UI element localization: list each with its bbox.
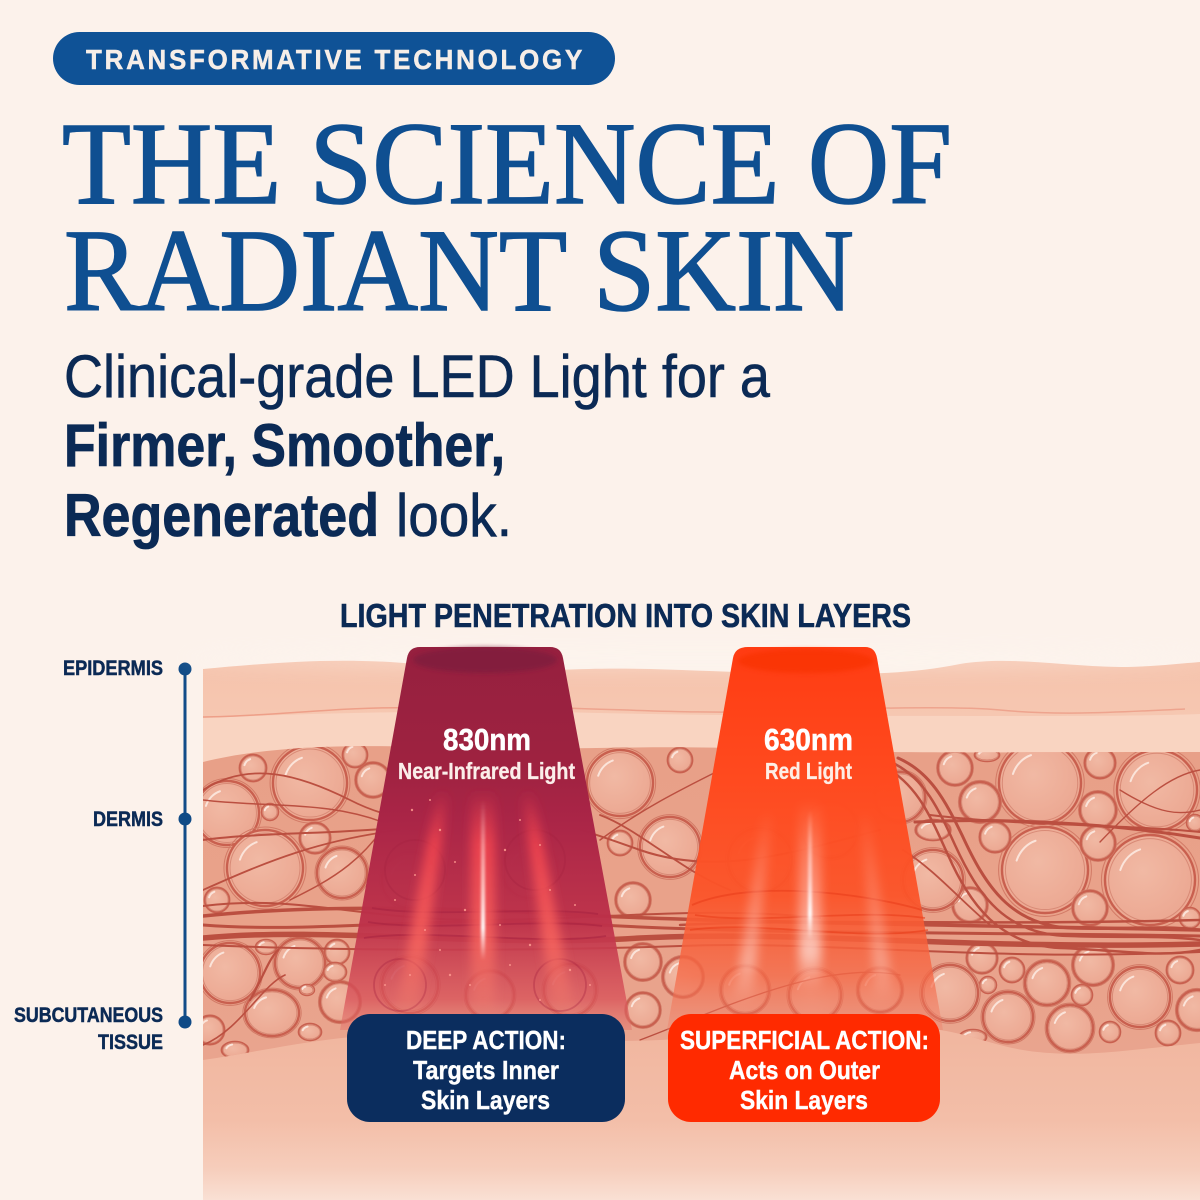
dermis and fat cells [192, 739, 1200, 1065]
subtitle: Firmer, Smoother, [64, 412, 505, 479]
light beam: 630nm red: Red Light [765, 758, 852, 784]
title: RADIANT SKIN [64, 205, 854, 336]
subtitle: Regenerated [64, 482, 379, 549]
light beam: 630nm red [667, 647, 943, 1030]
title: THE SCIENCE OF [62, 98, 952, 229]
callout: superficial action: Acts on Outer [729, 1055, 880, 1085]
callout: deep action: Skin Layers [421, 1085, 550, 1115]
skin layer axis: DERMIS [93, 808, 163, 831]
section heading: LIGHT PENETRATION INTO SKIN LAYERS [340, 597, 911, 634]
title [62, 98, 952, 336]
lower skin layer [203, 1000, 1200, 1200]
beam rays [396, 790, 574, 1010]
callout: deep action: Targets Inner [413, 1055, 559, 1085]
callout: superficial action [668, 1014, 940, 1122]
badge: transformative technology [53, 32, 615, 85]
callout: superficial action: SUPERFICIAL ACTION: [680, 1025, 929, 1055]
light beam: 830nm near-infrared: Near-Infrared Light [398, 758, 575, 784]
subtitle: Clinical-grade LED Light for a [64, 343, 771, 410]
collagen fibers [203, 758, 1200, 1045]
epidermis strata lines [203, 708, 1200, 762]
skin layer axis: EPIDERMIS [63, 657, 163, 680]
sparkles [384, 799, 591, 1001]
emitter shading [413, 647, 557, 673]
light beam: 830nm near-infrared [340, 647, 632, 1030]
skin cross-section illustration [180, 648, 1200, 1200]
haze above skin [180, 648, 1200, 668]
light beam: 630nm red: 630nm [764, 722, 853, 757]
badge: transformative technology: TRANSFORMATIVE TECHNOLOGY [86, 44, 585, 75]
emitter shading [738, 649, 874, 673]
inner fibers seen through the beam [690, 891, 928, 934]
skin layer axis: TISSUE [98, 1031, 163, 1054]
epidermis layer [203, 661, 1200, 770]
callout: deep action [347, 1014, 625, 1122]
subtitle: look. [396, 482, 512, 549]
inner fibers seen through the beam [364, 830, 606, 1011]
callout: deep action: DEEP ACTION: [406, 1025, 566, 1055]
subtitle [64, 343, 771, 549]
light beam: 830nm near-infrared: 830nm [443, 722, 531, 757]
skin layer axis: SUBCUTANEOUS [14, 1004, 163, 1027]
skin layer axis [14, 657, 192, 1054]
beam rays [734, 800, 894, 1000]
callout: superficial action: Skin Layers [740, 1085, 868, 1115]
